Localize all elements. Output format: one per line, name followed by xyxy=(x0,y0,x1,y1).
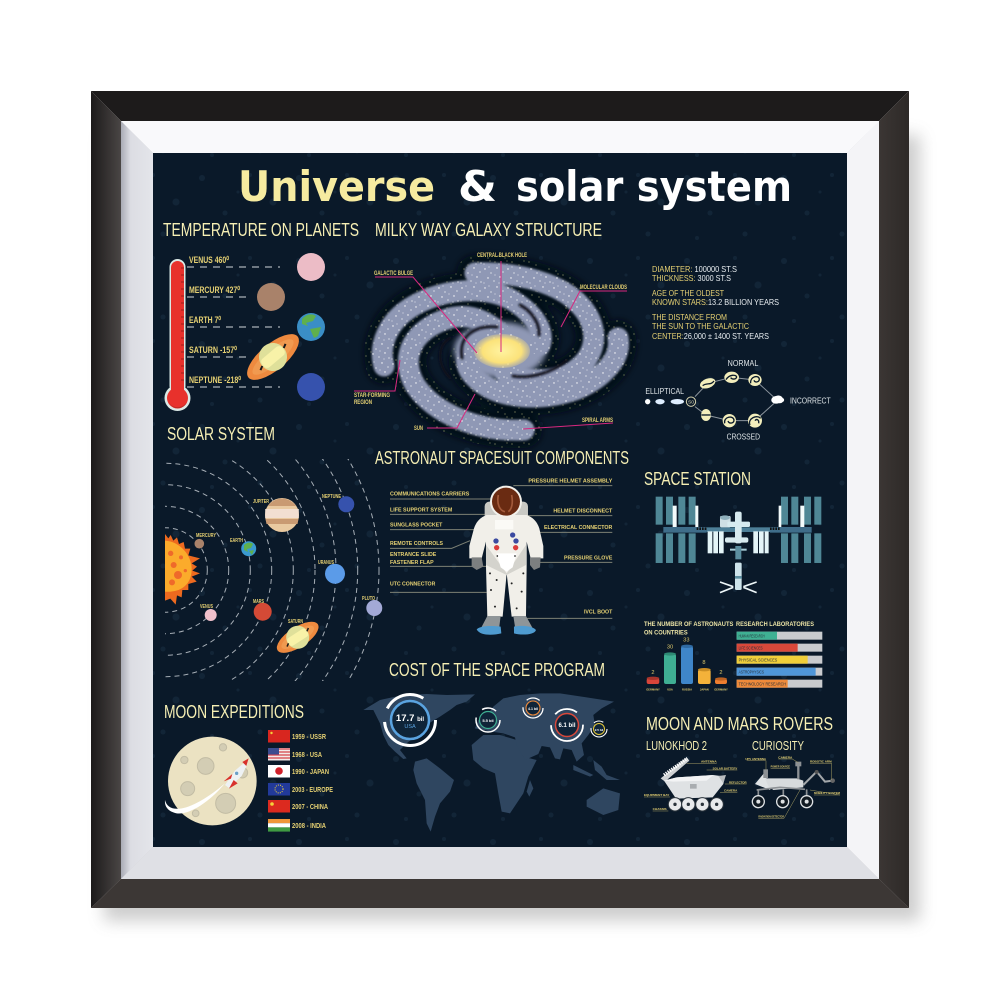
callout labels xyxy=(390,479,613,616)
rover labels: UPV ANTENNA xyxy=(745,757,767,761)
bar chart: astronauts by country: GERMANY xyxy=(714,687,728,691)
flag labels xyxy=(292,732,333,830)
planet labels: SATURN xyxy=(288,619,303,625)
panel: moon and mars rovers xyxy=(644,714,840,819)
planet: mercury xyxy=(194,539,204,548)
title xyxy=(238,162,792,211)
planet: venus xyxy=(297,253,325,281)
icon: thermometer xyxy=(164,259,190,411)
diagram: galaxy morphology classification: S0 xyxy=(688,400,694,406)
diagram: galaxy morphology classification: INCORRECT xyxy=(790,396,831,406)
text block: galaxy facts: THE SUN TO THE GALACTIC xyxy=(652,321,749,331)
planet labels: MERCURY xyxy=(196,533,217,539)
diagram: galaxy morphology classification: NORMAL xyxy=(728,358,758,368)
callout labels: IVCL BOOT xyxy=(584,610,613,616)
rover labels: CAMERA xyxy=(724,789,738,793)
callout labels: PRESSURE HELMET ASSEMBLY xyxy=(528,479,613,485)
rover labels: POWER SOURCE xyxy=(771,765,790,769)
heading: MOON EXPEDITIONS xyxy=(164,702,304,722)
planet: mars xyxy=(254,603,272,621)
planet labels: PLUTO xyxy=(362,596,375,602)
chart: number of astronauts and research laboratories xyxy=(644,621,822,691)
picture frame xyxy=(91,91,909,908)
astronaut figure and callouts xyxy=(390,479,613,635)
bar chart: astronauts by country: 2 xyxy=(719,670,723,676)
text block: galaxy facts: THE DISTANCE FROM xyxy=(652,312,727,322)
galaxy labels: STAR-FORMING xyxy=(354,393,390,399)
bar chart: astronauts by country xyxy=(646,638,728,691)
galaxy labels: SUN xyxy=(414,426,423,432)
planet: earth xyxy=(241,541,256,556)
dashed level lines xyxy=(187,267,280,387)
bar chart: research laboratories xyxy=(737,632,822,688)
rover labels: MOBILITY SYSTEM xyxy=(814,791,840,795)
rover labels: ANTENNA xyxy=(701,760,718,764)
gauge: Japan xyxy=(591,721,607,737)
panel: astronaut spacesuit components xyxy=(375,448,629,635)
heading: SPACE STATION xyxy=(644,469,751,489)
planet: jupiter xyxy=(265,498,299,532)
flags list xyxy=(268,730,333,832)
planet: mercury xyxy=(257,283,285,311)
rover labels xyxy=(644,755,840,819)
rover labels: REFLECTOR xyxy=(729,780,747,784)
heading: MOON AND MARS ROVERS xyxy=(646,714,833,734)
galaxy labels: GALACTIC BULGE xyxy=(374,271,413,277)
rover labels: EQUIPMENT BAY xyxy=(644,793,669,797)
bar chart: research laboratories: TECHNOLOGY RESEARCH xyxy=(739,681,786,686)
temperature labels: SATURN -157⁰ xyxy=(189,345,237,356)
bar chart: research laboratories: HUMAN RESEARCH xyxy=(739,633,765,638)
rover labels: CAMERA xyxy=(778,755,793,759)
galaxy labels: REGION xyxy=(354,400,372,406)
planet: pluto xyxy=(366,600,382,616)
chart titles: RESEARCH LABORATORIES xyxy=(736,621,814,628)
orbits xyxy=(165,459,380,681)
temperature labels: VENUS 460⁰ xyxy=(189,255,229,266)
sub-heading: Curiosity: CURIOSITY xyxy=(752,738,804,753)
text block: galaxy facts: DIAMETER: 100000 ST.S xyxy=(652,264,737,274)
bar chart: astronauts by country: 2 xyxy=(651,670,655,676)
panel: cost of the space program xyxy=(363,660,620,832)
flag labels: 1968 - USA xyxy=(292,750,322,759)
diagram: galaxy morphology classification: ELLIPTICAL xyxy=(645,386,684,396)
flag: Europe xyxy=(268,783,290,796)
planet: saturn xyxy=(271,615,324,660)
planet labels: VENUS xyxy=(200,604,213,610)
heading: COST OF THE SPACE PROGRAM xyxy=(389,660,605,680)
callout labels: ENTRANCE SLIDE xyxy=(390,552,437,558)
flag labels: 1990 - JAPAN xyxy=(292,767,329,776)
gauge: USA xyxy=(384,694,436,746)
bar chart: astronauts by country: USA xyxy=(667,687,673,691)
callout labels: LIFE SUPPORT SYSTEM xyxy=(390,507,453,513)
temperature labels: EARTH 7⁰ xyxy=(189,315,221,326)
callout labels: ELECTRICAL CONNECTOR xyxy=(544,525,612,531)
flag labels: 2003 - EUROPE xyxy=(292,785,333,794)
rover labels: RADIATION DETECTOR xyxy=(758,815,785,819)
callout labels: UTC CONNECTOR xyxy=(390,581,435,587)
title: Universe xyxy=(238,162,435,211)
planet labels: EARTH xyxy=(230,538,243,544)
gauge: Japan: 2.5 bil xyxy=(595,728,603,732)
title: solar system xyxy=(516,162,792,211)
text block: galaxy facts: THICKNESS: 3000 ST.S xyxy=(652,273,731,283)
planet labels: NEPTUNE xyxy=(322,494,342,500)
callout labels: REMOTE CONTROLS xyxy=(390,541,443,547)
drop shadow xyxy=(104,135,920,921)
flag labels: 2007 - CHINA xyxy=(292,802,328,811)
flag: Japan xyxy=(268,765,290,778)
galaxy labels xyxy=(354,253,627,432)
heading: SOLAR SYSTEM xyxy=(167,424,275,444)
icon: Lunokhod 2 rover xyxy=(661,757,726,811)
callout labels: FASTENER FLAP xyxy=(390,560,434,566)
galaxy callout lines xyxy=(354,261,627,429)
diagram: galaxy morphology classification: CROSSED xyxy=(727,431,760,441)
panel: space station xyxy=(644,469,821,593)
bar chart: research laboratories: LIFE SCIENCES xyxy=(739,645,763,650)
callout labels: SUNGLASS POCKET xyxy=(390,522,443,528)
flag: USSR xyxy=(268,730,290,742)
chart titles: THE NUMBER OF ASTRONAUTS xyxy=(644,621,734,628)
rover labels: CHASSIS xyxy=(653,807,667,811)
white mat xyxy=(121,121,879,879)
planet: neptune xyxy=(297,373,325,401)
gauge: China xyxy=(551,709,583,741)
gauge: USA: USA xyxy=(404,724,416,730)
bar chart: astronauts by country: 30 xyxy=(667,644,673,650)
gauge: Europe: 5.5 bil xyxy=(482,718,494,723)
galaxy labels: MOLECULAR CLOUDS xyxy=(580,285,627,291)
text block: galaxy facts xyxy=(652,264,779,341)
panel: moon expeditions xyxy=(164,702,333,832)
world map xyxy=(363,693,620,832)
panel: milky way galaxy structure xyxy=(354,220,627,432)
planet labels: MARS xyxy=(253,599,264,605)
text block: galaxy facts: AGE OF THE OLDEST xyxy=(652,288,724,298)
icon: Curiosity rover xyxy=(752,762,835,808)
text block: galaxy facts: CENTER:26,000 ± 1400 ST. YEARS xyxy=(652,331,769,341)
callout lines xyxy=(390,486,612,618)
galaxy xyxy=(382,273,618,430)
planet: neptune xyxy=(338,496,354,512)
flag: USA xyxy=(268,748,290,760)
flag labels: 2008 - INDIA xyxy=(292,821,326,830)
bar chart: research laboratories: ASTROPHYSICS xyxy=(739,669,764,674)
galaxy labels: SPIRAL ARMS xyxy=(582,418,613,424)
bar chart: research laboratories: PHYSICAL SCIENCES xyxy=(739,657,777,662)
callout labels: HELMET DISCONNECT xyxy=(553,508,613,514)
bar chart: astronauts by country: 8 xyxy=(702,660,706,666)
sub-heading: Lunokhod 2: LUNOKHOD 2 xyxy=(646,738,707,753)
flag: India xyxy=(268,819,290,832)
gauge: Europe xyxy=(476,708,500,732)
chart titles xyxy=(644,621,814,637)
icon: sun xyxy=(165,534,200,605)
heading: ASTRONAUT SPACESUIT COMPONENTS xyxy=(375,448,629,468)
temperature labels xyxy=(189,255,241,386)
chart titles: ON COUNTRIES xyxy=(644,630,688,637)
gauge: Russia xyxy=(523,698,543,718)
gauge: Russia: 4.1 bil xyxy=(528,707,538,711)
temperature labels: MERCURY 427⁰ xyxy=(189,285,240,296)
bar chart: astronauts by country: JAPAN xyxy=(700,687,709,691)
rover labels: SOLAR BATTERY xyxy=(713,766,737,770)
flag labels: 1959 - USSR xyxy=(292,732,326,741)
flag: China xyxy=(268,800,290,812)
galaxy labels: CENTRAL BLACK HOLE xyxy=(477,253,527,259)
panel: temperature on planets xyxy=(163,220,359,411)
planet: earth xyxy=(297,313,325,341)
rover callout lines xyxy=(644,759,840,818)
panel: solar system xyxy=(165,427,382,681)
text block: galaxy facts: KNOWN STARS:13.2 BILLION YEARS xyxy=(652,297,779,307)
callout labels: COMMUNICATIONS CARRIERS xyxy=(390,492,470,498)
bar chart: astronauts by country: 33 xyxy=(683,638,689,644)
temperature labels: NEPTUNE -218⁰ xyxy=(189,375,241,386)
planet labels xyxy=(196,494,375,625)
rover labels: ROBOTIC ARM xyxy=(810,760,832,764)
bar chart: astronauts by country: RUSSIA xyxy=(682,687,692,691)
poster background xyxy=(153,153,847,847)
planet labels: URANUS xyxy=(318,560,334,566)
title: & xyxy=(458,162,497,211)
icon: space station xyxy=(656,497,821,593)
planet: saturn xyxy=(239,326,307,388)
icon: moon with rocket xyxy=(165,737,257,825)
gauge: USA: 17.7 bil xyxy=(396,713,424,724)
icon: astronaut xyxy=(469,486,543,635)
planet: uranus xyxy=(325,564,345,584)
diagram: galaxy morphology classification xyxy=(645,358,831,441)
heading: TEMPERATURE ON PLANETS xyxy=(163,220,359,240)
planet: venus xyxy=(205,609,217,621)
gauge: China: 6.1 bil xyxy=(558,723,576,729)
callout labels: PRESSURE GLOVE xyxy=(564,555,613,561)
bar chart: astronauts by country: GERMANY xyxy=(646,687,660,691)
planet labels: JUPITER xyxy=(253,499,269,505)
heading: MILKY WAY GALAXY STRUCTURE xyxy=(375,220,602,240)
